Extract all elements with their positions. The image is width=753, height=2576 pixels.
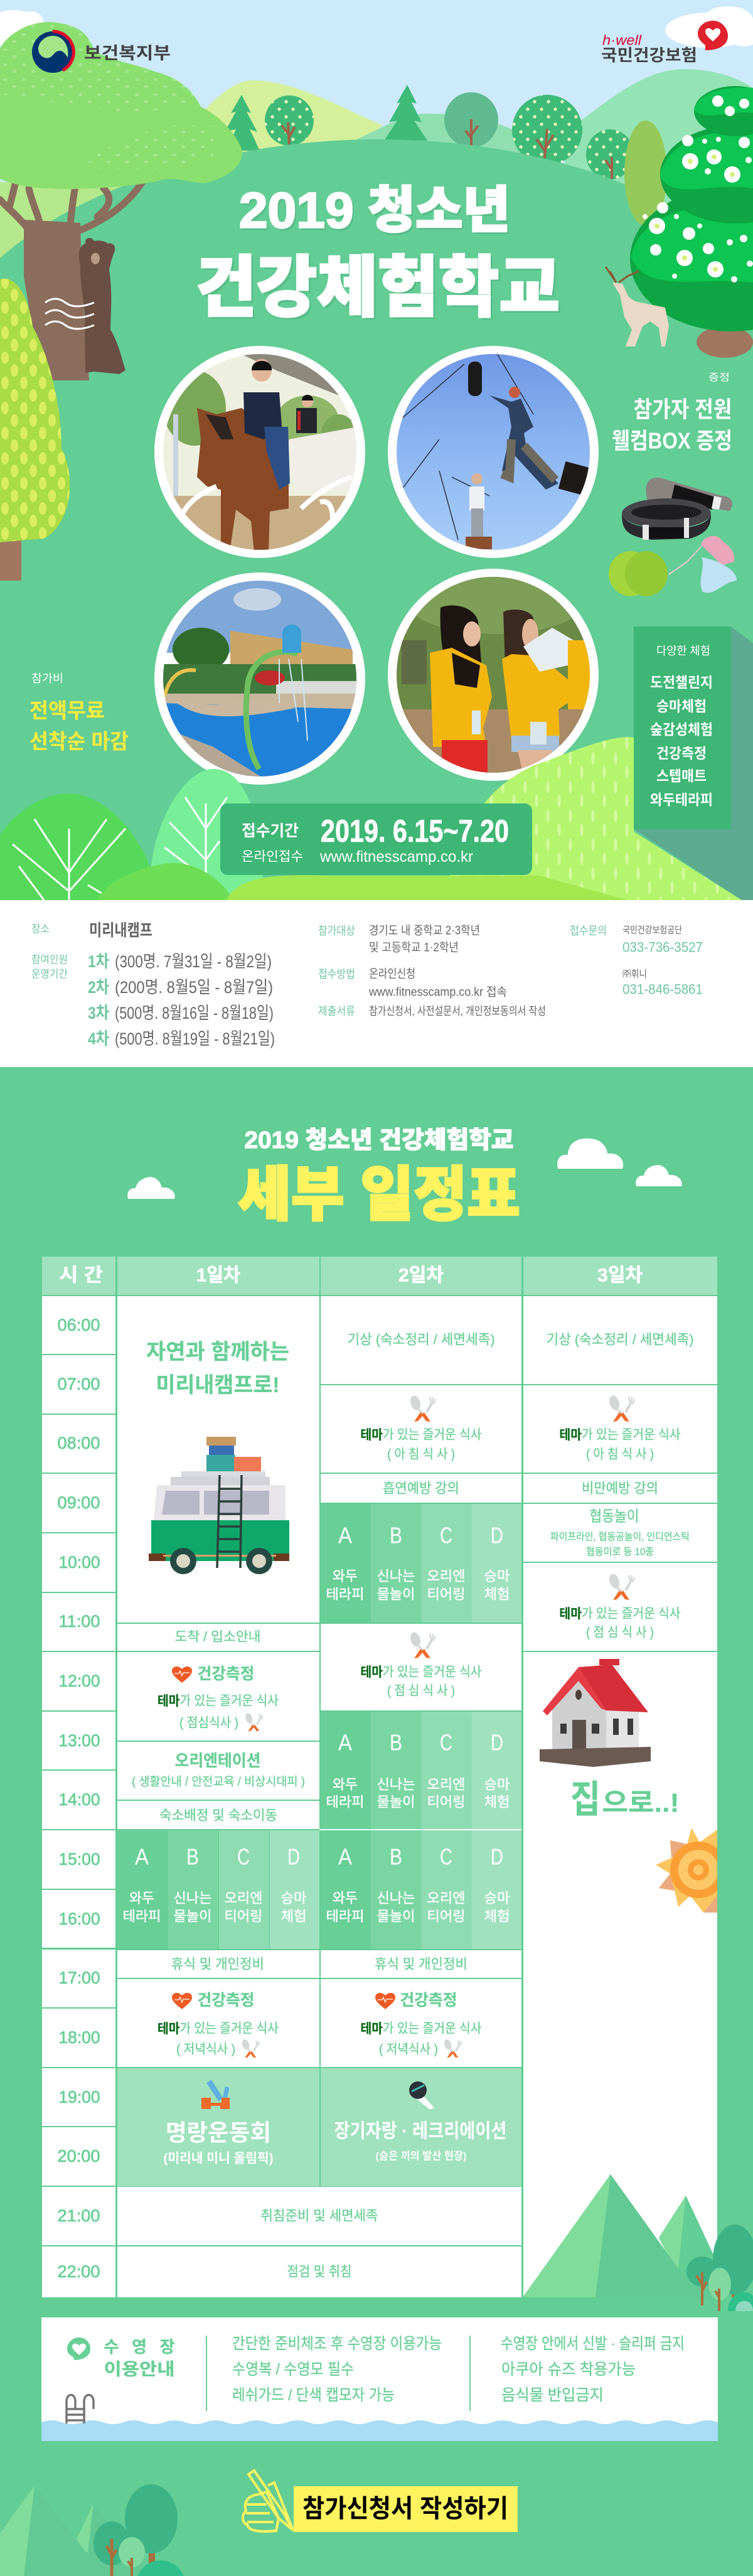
schedule heading: 2019 청소년 건강체험학교 bbox=[245, 1127, 513, 1154]
background hills bbox=[0, 69, 753, 295]
day 1: arrival: 도착 / 입소안내 bbox=[174, 1629, 261, 1645]
panel: pool guide: 수영복 / 수영모 필수 bbox=[232, 2361, 354, 2378]
title bbox=[196, 182, 562, 328]
day 2: late activity ABCD: 티어링 bbox=[427, 1908, 466, 1924]
gift heading: 웰컴BOX 증정 bbox=[612, 428, 732, 453]
day 2: morning activity ABCD: 승마 bbox=[484, 1568, 510, 1584]
text block: target, method, documents: 경기도 내 중학교 2·3학년 bbox=[369, 924, 480, 938]
fee info bbox=[29, 672, 129, 753]
day 2: afternoon activity ABCD: 물놀이 bbox=[376, 1794, 415, 1810]
day 2: afternoon activity ABCD: 체험 bbox=[484, 1794, 510, 1810]
main green hill bbox=[0, 139, 753, 900]
closing: bedtime preparation: 취침준비 및 세면세족 bbox=[261, 2208, 378, 2223]
going home text: 집 bbox=[570, 1779, 601, 1820]
day 3: breakfast: 테마가 있는 즐거운 식사 bbox=[560, 1427, 680, 1442]
day 2: anti-smoking lecture bbox=[321, 1474, 521, 1503]
photo: water park bbox=[154, 572, 365, 785]
panel: schedule section background bbox=[0, 1067, 753, 2576]
closing: bedtime preparation bbox=[117, 2187, 521, 2245]
time column bbox=[42, 1296, 115, 2297]
panel: pool guide: 수영장 안에서 신발 · 슬리퍼 금지 bbox=[501, 2335, 685, 2353]
time column: 06:00 bbox=[58, 1316, 100, 1334]
panel: pool guide: 수 영 장 bbox=[104, 2337, 175, 2356]
table header: 1일차 bbox=[196, 1265, 240, 1285]
text block: place and sessions: (200명. 8월5일 - 8월7일) bbox=[115, 978, 273, 997]
right tiered tree bbox=[630, 86, 753, 358]
panel: application period: 2019. 6.15~7.20 bbox=[321, 813, 509, 849]
day 1: health check and lunch: 테마가 있는 즐거운 식사 bbox=[158, 1693, 279, 1709]
panel: application period: 접수기간 bbox=[242, 822, 299, 840]
button: fill in application: 참가신청서 작성하기 bbox=[302, 2495, 508, 2523]
day 1: activity block ABCD: C bbox=[237, 1844, 250, 1869]
text block: place and sessions: 1차 bbox=[88, 952, 109, 971]
photo: horse riding bbox=[154, 346, 365, 558]
day 2: health check and dinner: 테마가 있는 즐거운 식사 bbox=[360, 2021, 482, 2036]
gift heading bbox=[612, 372, 732, 453]
text block: contacts: ㈜휘니 bbox=[622, 969, 647, 979]
time column: 20:00 bbox=[58, 2147, 100, 2165]
clouds in the sky bbox=[0, 6, 753, 48]
day 1: activity block ABCD: 와두 bbox=[129, 1891, 154, 1906]
day 3: breakfast bbox=[523, 1385, 717, 1473]
day 1: nature camp cell: 자연과 함께하는 bbox=[146, 1340, 289, 1364]
schedule heading: 세부 일정표 bbox=[238, 1161, 520, 1228]
day 2: late activity ABCD: 테라피 bbox=[326, 1908, 364, 1924]
day 2: lunch bbox=[321, 1624, 521, 1710]
panel: pool guide: 간단한 준비체조 후 수영장 이용가능 bbox=[232, 2335, 442, 2353]
day 2: wake up bbox=[321, 1296, 521, 1384]
day 2: late activity ABCD: 와두 bbox=[333, 1891, 358, 1906]
photo: forest experience bbox=[388, 569, 599, 781]
time column: 09:00 bbox=[58, 1493, 100, 1512]
left lime bush bbox=[0, 279, 70, 581]
big left tree bbox=[0, 22, 242, 380]
bottom-left mountains and trees bbox=[0, 2484, 185, 2576]
day 3: wake up: 기상 (숙소정리 / 세면세족) bbox=[546, 1332, 694, 1347]
day 1: nature camp cell bbox=[117, 1296, 319, 1623]
day 1: activity block ABCD: 승마 bbox=[281, 1891, 306, 1906]
photo: high rope adventure bbox=[388, 346, 599, 558]
panel: various experiences bbox=[634, 626, 731, 829]
text block: place and sessions: (500명. 8월19일 - 8월21일) bbox=[115, 1029, 275, 1048]
time column: 10:00 bbox=[59, 1553, 100, 1572]
going home text: 으로..! bbox=[602, 1788, 679, 1818]
day 3: teamwork games: 협동미로 등 10종 bbox=[586, 1547, 654, 1558]
day 1: room assignment: 숙소배정 및 숙소이동 bbox=[159, 1808, 277, 1823]
mountains and trees at table corner bbox=[523, 2174, 753, 2311]
day 1: activity block ABCD: 물놀이 bbox=[173, 1908, 212, 1924]
text block: contacts: 033-736-3527 bbox=[622, 939, 703, 955]
day 2: late activity ABCD: B bbox=[390, 1844, 402, 1869]
text block: target, method, documents: 및 고등학교 1·2학년 bbox=[369, 940, 459, 954]
day 2: health check and dinner: ( 저녁식사 ) bbox=[379, 2042, 438, 2056]
day 2: morning activity ABCD: C bbox=[440, 1523, 452, 1548]
day 2: morning activity ABCD: 오리엔 bbox=[427, 1568, 466, 1584]
panel: various experiences: 스텝매트 bbox=[656, 768, 707, 784]
logo: national health insurance: h·well bbox=[602, 33, 642, 48]
time column: 19:00 bbox=[59, 2088, 100, 2106]
time column: 14:00 bbox=[59, 1790, 100, 1809]
panel: various experiences: 승마체험 bbox=[656, 698, 707, 714]
fee info: 전액무료 bbox=[29, 699, 105, 722]
title: 건강체험학교 bbox=[196, 251, 560, 325]
text block: contacts: 접수문의 bbox=[570, 925, 607, 937]
time column: 08:00 bbox=[58, 1434, 100, 1452]
button: fill in application bbox=[243, 2471, 518, 2532]
title: 건강체험학교 bbox=[198, 254, 562, 328]
day 2: afternoon activity ABCD: C bbox=[440, 1730, 452, 1755]
day 3: wake up bbox=[523, 1296, 717, 1384]
text block: place and sessions: 미리내캠프 bbox=[89, 921, 152, 940]
background trees row bbox=[225, 85, 634, 180]
table header: 2일차 bbox=[398, 1265, 444, 1285]
text block: place and sessions: (500명. 8월16일 - 8월18일) bbox=[115, 1004, 274, 1022]
text block: contacts bbox=[570, 925, 703, 997]
day 2: afternoon activity ABCD: 테라피 bbox=[326, 1794, 364, 1810]
icon: camper van with luggage bbox=[149, 1437, 289, 1574]
day 2: talent show bbox=[321, 2068, 521, 2186]
day 2: late activity ABCD: 승마 bbox=[484, 1891, 510, 1906]
icon: bear on the tree bbox=[45, 238, 125, 374]
time column: 11:00 bbox=[59, 1612, 100, 1631]
time column: 13:00 bbox=[59, 1731, 100, 1750]
day 2: health check and dinner bbox=[321, 1979, 521, 2067]
panel: various experiences: 와두테라피 bbox=[650, 792, 713, 808]
day 2: breakfast: 테마가 있는 즐거운 식사 bbox=[360, 1427, 482, 1442]
logo: national health insurance: 국민건강보험 bbox=[601, 46, 697, 65]
side panel shadow bbox=[634, 626, 753, 900]
day 1: activity block ABCD: 오리엔 bbox=[225, 1891, 262, 1906]
day 2: afternoon activity ABCD: 오리엔 bbox=[427, 1776, 466, 1793]
day 2: afternoon activity ABCD: 티어링 bbox=[427, 1794, 466, 1810]
day 2: talent show: (숨은 끼의 발산 현장) bbox=[375, 2150, 467, 2162]
hero background: sky bbox=[0, 0, 753, 900]
day 1: mini olympics bbox=[117, 2068, 319, 2186]
day 2: breakfast bbox=[321, 1385, 521, 1473]
text block: place and sessions: 장소 bbox=[31, 923, 50, 935]
day 2: late activity ABCD: D bbox=[491, 1844, 503, 1869]
day 1: rest: 휴식 및 개인정비 bbox=[171, 1956, 264, 1972]
time column: 15:00 bbox=[59, 1850, 100, 1869]
day 3: obesity lecture: 비만예방 강의 bbox=[582, 1480, 658, 1496]
day 2: lunch: 테마가 있는 즐거운 식사 bbox=[360, 1665, 482, 1680]
day 1: health check and lunch bbox=[117, 1652, 319, 1741]
day 3: breakfast: ( 아 침 식 사 ) bbox=[586, 1447, 654, 1461]
time column: 16:00 bbox=[59, 1909, 100, 1928]
day 2: afternoon activity ABCD: 와두 bbox=[333, 1776, 358, 1793]
day 2: afternoon activity ABCD: B bbox=[390, 1730, 402, 1755]
day 2: late activity ABCD: A bbox=[338, 1844, 352, 1869]
day 1: orientation: 오리엔테이션 bbox=[174, 1751, 261, 1770]
panel: pool guide: 아쿠아 슈즈 착용가능 bbox=[501, 2361, 636, 2378]
day 2: breakfast: ( 아 침 식 사 ) bbox=[387, 1447, 455, 1461]
day 1: orientation: ( 생활안내 / 안전교육 / 비상시대피 ) bbox=[132, 1775, 305, 1789]
closing: roll call and sleep: 점검 및 취침 bbox=[287, 2263, 351, 2280]
icon: sun bbox=[656, 1828, 717, 1913]
panel: pool guide: 음식물 반입금지 bbox=[501, 2386, 604, 2404]
day 2: late activity ABCD bbox=[319, 1829, 521, 1949]
time column: 17:00 bbox=[59, 1968, 100, 1987]
text block: target, method, documents: www.fitnesscamp.co.kr 접속 bbox=[368, 985, 507, 999]
panel: pool guide: 레쉬가드 / 단색 캡모자 가능 bbox=[232, 2386, 395, 2404]
day 1: activity block ABCD: B bbox=[186, 1844, 199, 1869]
title: 2019 청소년 bbox=[241, 185, 512, 241]
day 2: rest bbox=[321, 1950, 521, 1978]
text block: place and sessions: 3차 bbox=[88, 1004, 109, 1022]
day 1: mini olympics: 명랑운동회 bbox=[166, 2120, 271, 2145]
day 1: health check and lunch: ( 점심식사 ) bbox=[179, 1716, 238, 1730]
panel: various experiences: 건강측정 bbox=[656, 745, 707, 761]
day 2: morning activity ABCD: 티어링 bbox=[427, 1587, 466, 1602]
text block: target, method, documents: 참가신청서, 사전설문서, 개인정보동의서 작성 bbox=[369, 1005, 546, 1017]
text block: place and sessions: 2차 bbox=[88, 978, 109, 997]
day 1: health check and dinner bbox=[117, 1979, 319, 2067]
day 2: afternoon activity ABCD: 승마 bbox=[484, 1776, 510, 1793]
day 1: arrival bbox=[117, 1624, 319, 1651]
day 2: late activity ABCD: 오리엔 bbox=[427, 1891, 466, 1906]
text block: place and sessions: (300명. 7월31일 - 8월2일) bbox=[115, 952, 272, 971]
day 2: morning activity ABCD: 신나는 bbox=[376, 1568, 415, 1584]
text block: target, method, documents: 제출서류 bbox=[318, 1005, 355, 1017]
day 1: mini olympics: (미리내 미니 올림픽) bbox=[163, 2152, 274, 2165]
text block: place and sessions: 참여인원 bbox=[31, 954, 68, 965]
day 1: activity block ABCD: 신나는 bbox=[173, 1891, 212, 1906]
day 2: rest: 휴식 및 개인정비 bbox=[375, 1956, 467, 1972]
fee info: 선착순 마감 bbox=[29, 729, 129, 753]
logo: ministry of health and welfare bbox=[32, 31, 171, 73]
icon: pool ladder bbox=[66, 2395, 93, 2423]
day 2: talent show: 장기자랑 · 레크리에이션 bbox=[334, 2120, 507, 2142]
panel: information section background bbox=[0, 900, 753, 1067]
day 2: afternoon activity ABCD bbox=[321, 1712, 521, 1829]
day 3: obesity lecture bbox=[523, 1474, 717, 1503]
time column: 22:00 bbox=[58, 2262, 100, 2281]
day 3: lunch bbox=[523, 1563, 717, 1651]
day 2: health check and dinner: 건강측정 bbox=[400, 1992, 457, 2009]
day 2: morning activity ABCD: 와두 bbox=[333, 1568, 358, 1584]
bottom foliage bbox=[0, 737, 742, 900]
day 2: afternoon activity ABCD: 신나는 bbox=[376, 1776, 415, 1793]
text block: target, method, documents bbox=[318, 924, 546, 1017]
day 2: late activity ABCD: 신나는 bbox=[376, 1891, 415, 1906]
icon: white deer bbox=[606, 267, 669, 346]
tall olive tree bbox=[624, 121, 667, 226]
text block: target, method, documents: 참가대상 bbox=[318, 925, 355, 937]
day 1: health check and dinner: ( 저녁식사 ) bbox=[176, 2042, 235, 2056]
day 2: late activity ABCD: 물놀이 bbox=[376, 1908, 415, 1924]
panel: pool guide bbox=[41, 2317, 718, 2441]
panel: application period bbox=[220, 803, 532, 875]
day 3: teamwork games: 파이프라인, 협동공놀이, 인디언스틱 bbox=[550, 1532, 690, 1543]
going home text bbox=[570, 1779, 679, 1820]
day 1: orientation bbox=[117, 1742, 319, 1800]
table header: 시 간 bbox=[59, 1265, 103, 1285]
gift products: smart bands and massage balls bbox=[609, 478, 737, 596]
table header: 3일차 bbox=[597, 1265, 643, 1285]
time column: 21:00 bbox=[58, 2206, 100, 2225]
day 1: health check and dinner: 건강측정 bbox=[197, 1992, 255, 2009]
logo: ministry of health and welfare: 보건복지부 bbox=[84, 44, 171, 63]
day 3: lunch: ( 점 심 식 사 ) bbox=[586, 1626, 654, 1640]
fee info: 참가비 bbox=[31, 672, 63, 685]
day 2: morning activity ABCD: A bbox=[338, 1523, 352, 1548]
panel: various experiences: 도전챌린지 bbox=[650, 674, 713, 690]
panel: application period: 온라인접수 bbox=[242, 850, 303, 864]
text block: target, method, documents: 온라인신청 bbox=[369, 967, 415, 980]
text block: place and sessions: 4차 bbox=[88, 1029, 109, 1048]
day 2: late activity ABCD: 체험 bbox=[484, 1908, 510, 1924]
day 1: activity block ABCD: A bbox=[135, 1844, 149, 1869]
day 2: morning activity ABCD: 물놀이 bbox=[376, 1587, 415, 1602]
day 3: teamwork games: 협동놀이 bbox=[590, 1508, 639, 1525]
day 2: lunch: ( 점 심 식 사 ) bbox=[387, 1683, 455, 1699]
day 2: morning activity ABCD: 체험 bbox=[484, 1587, 510, 1602]
schedule heading bbox=[238, 1127, 520, 1228]
clouds near heading bbox=[127, 1139, 682, 1199]
day 2: morning activity ABCD: D bbox=[491, 1523, 503, 1548]
text block: contacts: 국민건강보험공단 bbox=[622, 925, 682, 935]
day 1: health check and dinner: 테마가 있는 즐거운 식사 bbox=[158, 2021, 279, 2036]
day 3: teamwork games bbox=[523, 1504, 717, 1562]
day 2: afternoon activity ABCD: D bbox=[491, 1730, 503, 1755]
day 1: health check and lunch: 건강측정 bbox=[197, 1665, 255, 1683]
table header bbox=[42, 1257, 717, 1295]
day 3: going home cell bbox=[523, 1652, 717, 2297]
day 1: activity block ABCD: 체험 bbox=[281, 1908, 306, 1924]
icon: house bbox=[540, 1659, 651, 1767]
day 3: lunch: 테마가 있는 즐거운 식사 bbox=[560, 1607, 680, 1621]
day 1: rest bbox=[117, 1950, 319, 1978]
time column: 07:00 bbox=[58, 1375, 100, 1393]
icon: hand holding pen bbox=[243, 2471, 293, 2531]
gift heading: 증정 bbox=[708, 372, 730, 383]
day 2: afternoon activity ABCD: A bbox=[338, 1730, 352, 1755]
day 2: morning activity ABCD: B bbox=[390, 1523, 402, 1548]
panel: application period: www.fitnesscamp.co.kr bbox=[319, 848, 473, 866]
title: 2019 청소년 bbox=[239, 182, 510, 239]
panel: various experiences: 다양한 체험 bbox=[656, 645, 710, 657]
day 1: activity block ABCD: 테라피 bbox=[123, 1908, 161, 1924]
day 1: room assignment bbox=[117, 1801, 319, 1829]
time column: 18:00 bbox=[59, 2028, 100, 2047]
day 2: morning activity ABCD: 테라피 bbox=[326, 1587, 364, 1602]
day 1: activity block ABCD bbox=[117, 1830, 319, 1949]
closing: roll call and sleep bbox=[117, 2246, 521, 2297]
day 1: activity block ABCD: 티어링 bbox=[225, 1908, 262, 1924]
day 2: wake up: 기상 (숙소정리 / 세면세족) bbox=[348, 1332, 494, 1347]
time column: 12:00 bbox=[59, 1672, 100, 1690]
day 1: nature camp cell: 미리내캠프로! bbox=[156, 1373, 280, 1397]
panel: pool guide: 이용안내 bbox=[104, 2360, 174, 2379]
day 1: activity block ABCD: D bbox=[287, 1844, 300, 1869]
text block: place and sessions bbox=[31, 921, 275, 1048]
panel: various experiences: 숲감성체험 bbox=[650, 721, 713, 738]
text block: place and sessions: 운영기간 bbox=[31, 968, 68, 980]
text block: target, method, documents: 접수방법 bbox=[318, 968, 355, 980]
day 2: morning activity ABCD bbox=[321, 1504, 521, 1623]
icon: speech heart bbox=[67, 2337, 90, 2360]
text block: contacts: 031-846-5861 bbox=[622, 982, 703, 997]
day 2: late activity ABCD: C bbox=[440, 1844, 452, 1869]
logo: national health insurance bbox=[601, 21, 728, 65]
gift heading: 참가자 전원 bbox=[634, 397, 732, 422]
day 2: anti-smoking lecture: 흡연예방 강의 bbox=[383, 1480, 459, 1496]
